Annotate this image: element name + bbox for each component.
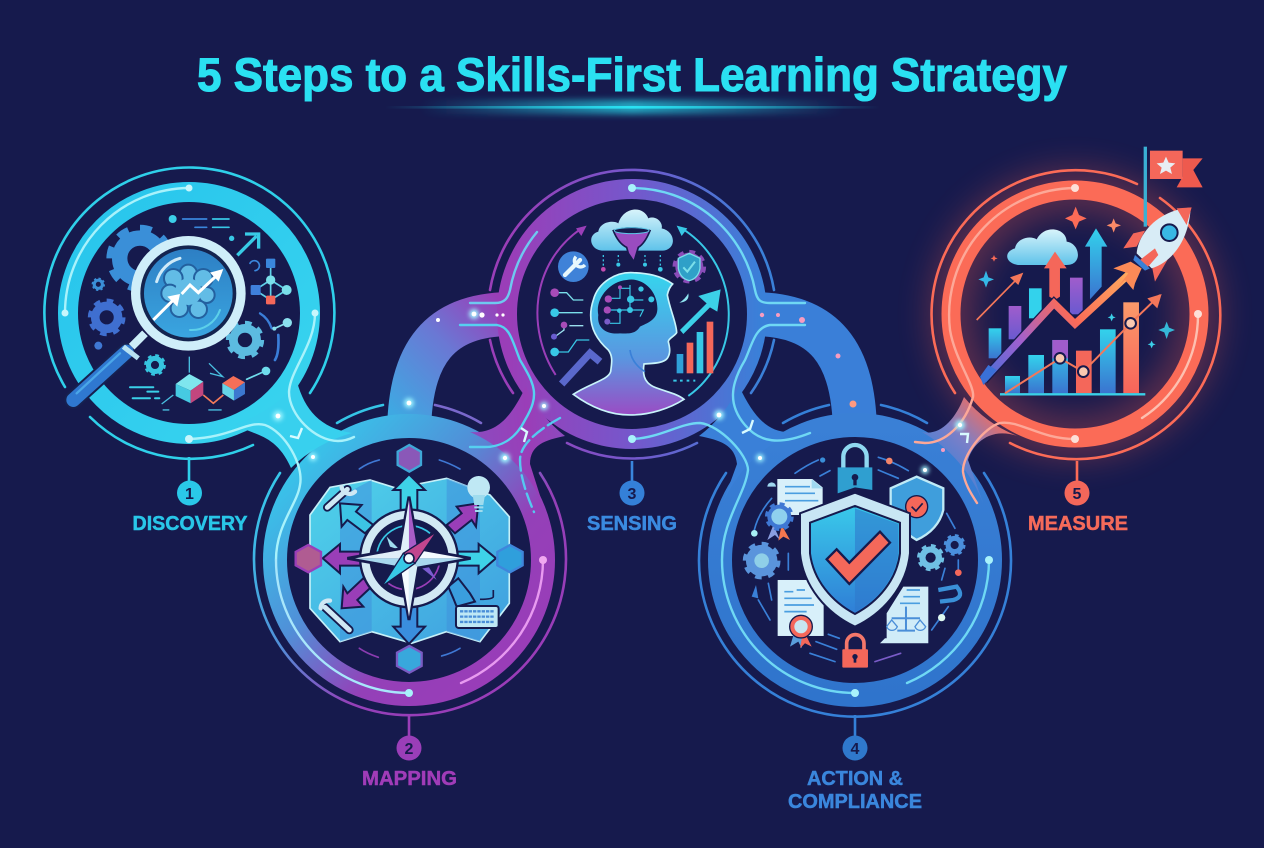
step 2 label (362, 715, 457, 790)
step 1: discovery icon (73, 215, 292, 410)
ring 2 band (254, 405, 566, 715)
icon: small shield (891, 477, 943, 540)
ring 1 band (44, 168, 334, 459)
step 3 label: 3 (628, 486, 637, 503)
icon: shield badge (675, 253, 703, 281)
icon: rising trail (980, 272, 1132, 385)
small leaf (679, 293, 689, 303)
icon: front bars (1000, 302, 1145, 394)
step 4 label: ACTION & (807, 768, 903, 790)
icon: wrenches (321, 487, 355, 630)
icon: keyboard (456, 590, 499, 628)
title: 5 Steps to a Skills-First Learning Strategy (197, 48, 1067, 101)
step 3: sensing icon (537, 209, 729, 415)
step 5 label (1028, 461, 1128, 535)
icon: certificate document (778, 580, 824, 648)
flowing light traces (62, 184, 1202, 697)
cloud drips (601, 255, 663, 272)
glow behind step 5 ring (951, 190, 1199, 438)
step 1 label: DISCOVERY (132, 513, 248, 535)
step 2: mapping icon (296, 445, 523, 673)
step 3 label: SENSING (587, 513, 677, 535)
step 5: measure icon (977, 147, 1203, 394)
compass arrows (323, 474, 496, 644)
icon: medium gear (91, 302, 122, 333)
icon: network nodes (251, 259, 292, 304)
brain cavity (598, 280, 657, 334)
step 4 label (788, 715, 922, 813)
step 4: action and compliance icon (746, 445, 964, 668)
icon: gears (746, 536, 964, 576)
step 4 label: COMPLIANCE (788, 791, 922, 813)
icon: compass (347, 497, 471, 620)
icon: main shield with check (800, 493, 910, 627)
step 1 label (132, 457, 248, 535)
icon: sparkles (978, 207, 1175, 348)
ring 3 band (490, 170, 774, 459)
icon: line chart (1005, 294, 1162, 393)
ring junctions (235, 382, 1020, 505)
step 1 label: 1 (185, 486, 194, 503)
icon: magnifier with brain (73, 236, 246, 400)
brain (161, 265, 215, 318)
icon: cloud and funnel (591, 209, 673, 262)
icon: blue ribbon badge (767, 505, 791, 541)
growth arrow (153, 274, 218, 320)
ring 4 band (699, 405, 1011, 717)
direction hexagons (296, 445, 523, 673)
icon: teal gear (146, 356, 164, 374)
icon: rocket (1123, 207, 1192, 282)
icon: small gear (93, 279, 104, 290)
orbit nodes (751, 457, 962, 621)
step 4 label: 4 (851, 741, 860, 758)
icon: legal scroll (880, 587, 960, 643)
icon: data cubes (162, 357, 245, 410)
step 2 label: 2 (405, 741, 414, 758)
icon: bars (673, 322, 713, 381)
icon: rocket flame (1113, 262, 1142, 290)
step 5 label: 5 (1073, 486, 1082, 503)
icon: right gear (229, 324, 261, 356)
icon: up arrows (977, 228, 1107, 320)
icon: growth arrow (680, 289, 721, 334)
cycle arrows (537, 228, 729, 396)
icon: back bars (989, 278, 1083, 358)
ring 5 band (932, 170, 1220, 459)
icon: cloud (1007, 229, 1078, 265)
icon: bottom padlock (842, 635, 868, 668)
orbit dashes (754, 457, 958, 662)
sparkle particles (273, 309, 968, 474)
decorative dots and dashes (94, 215, 292, 398)
arc dashes around compass (359, 460, 460, 657)
icon: document top left (767, 479, 823, 515)
folded map (310, 478, 509, 643)
icon: large gear top left (112, 230, 168, 286)
icon: trending arrow (237, 234, 259, 255)
icon: light bulb (467, 476, 490, 511)
title underline glow (385, 100, 880, 114)
icon: top padlock (838, 445, 872, 493)
icon: wrench badge (558, 251, 589, 282)
circuit lines left (550, 288, 589, 356)
step 5 label: MEASURE (1028, 513, 1128, 535)
icon: head silhouette with brain (573, 273, 684, 415)
connector arches (409, 314, 855, 436)
step 3 label (587, 461, 677, 535)
chevron (562, 353, 600, 384)
step 2 label: MAPPING (362, 768, 457, 790)
icon: flag (1144, 147, 1203, 227)
arrowheads (576, 226, 687, 236)
